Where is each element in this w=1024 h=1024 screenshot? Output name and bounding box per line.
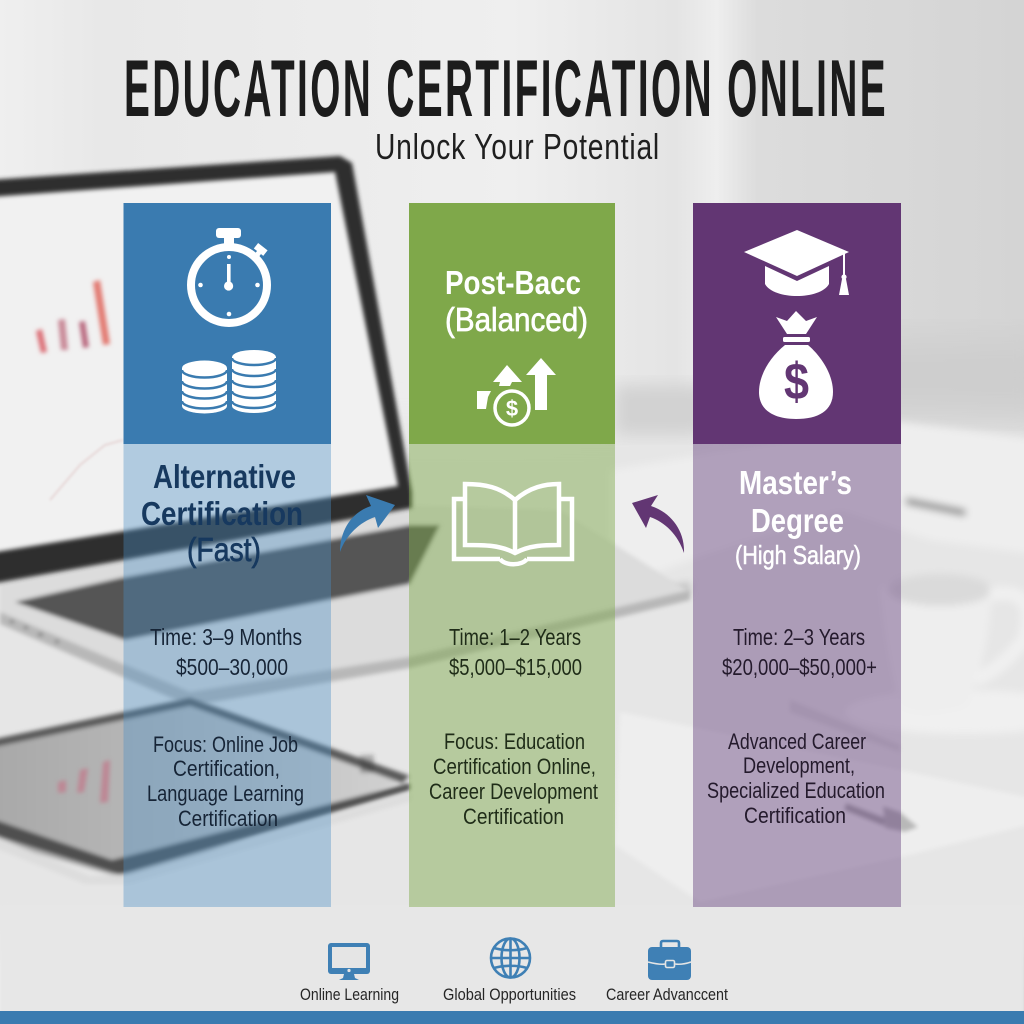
heading: post-bacc: (Balanced) — [445, 301, 588, 338]
heading: master's degree — [735, 464, 861, 570]
focus list: Development, — [743, 753, 855, 778]
laptop bar chart — [36, 280, 110, 353]
footer item: online learning — [300, 943, 399, 1004]
icon: coin stacks — [182, 350, 276, 414]
notebook and pen — [615, 700, 1024, 902]
tablet bar chart — [58, 760, 110, 803]
focus list: Certification, — [173, 756, 280, 781]
coffee cup — [845, 574, 1024, 734]
heading: post-bacc: Post-Bacc — [445, 264, 581, 301]
time and cost: Time: 1–2 Years — [449, 624, 581, 650]
icon: globe — [491, 938, 530, 978]
focus list: Career Development — [429, 779, 598, 804]
panel: master's degree — [693, 203, 901, 907]
heading: alternative certification: Certification — [141, 495, 303, 532]
icon: open book — [454, 484, 572, 564]
laptop base — [0, 505, 690, 706]
focus list: Certification Online, — [433, 754, 596, 779]
footer item: global opportunities: Global Opportunities — [443, 985, 576, 1004]
time and cost: Time: 3–9 Months — [150, 624, 302, 650]
focus list: Certification — [463, 804, 564, 829]
arrow: blue — [340, 495, 395, 552]
focus list: Certification — [178, 806, 278, 831]
subtitle: Unlock Your Potential — [375, 126, 660, 167]
heading: master's degree: Master’s — [739, 464, 852, 501]
time and cost — [722, 624, 877, 680]
time and cost: Time: 2–3 Years — [733, 624, 865, 650]
arrow: purple — [632, 495, 684, 553]
tablet — [0, 698, 412, 884]
icon: money growth arrows: $ — [506, 396, 518, 421]
time and cost — [150, 624, 302, 680]
heading: post-bacc — [445, 264, 588, 338]
focus list: Advanced Career — [728, 729, 866, 754]
time and cost: $20,000–$50,000+ — [722, 654, 877, 680]
heading: alternative certification — [141, 458, 303, 568]
focus list: Focus: Education — [444, 729, 585, 754]
icon: money bag — [759, 311, 833, 419]
footer item: online learning: Online Learning — [300, 985, 399, 1004]
panel: post-bacc — [409, 203, 615, 907]
focus list: Specialized Education — [707, 778, 885, 803]
footer item: career advancement: Career Advanccent — [606, 985, 728, 1004]
laptop screen — [0, 156, 412, 584]
footer item: career advancement — [606, 941, 728, 1004]
heading: master's degree: Degree — [751, 502, 844, 539]
focus list: Language Learning — [147, 781, 304, 806]
icon: money growth arrows — [477, 358, 556, 425]
heading: alternative certification: Alternative — [153, 458, 296, 495]
icon: briefcase — [648, 941, 691, 980]
icon: stopwatch — [191, 228, 268, 323]
heading: alternative certification: (Fast) — [187, 531, 261, 568]
focus list: Certification — [744, 803, 846, 828]
right background paper and pen — [610, 422, 1024, 612]
focus list: Focus: Online Job — [153, 732, 298, 757]
heading: master's degree: (High Salary) — [735, 540, 861, 570]
focus list — [147, 732, 304, 831]
icon: money bag: $ — [784, 353, 809, 411]
footer item: global opportunities — [443, 938, 576, 1004]
panel: alternative certification — [124, 203, 331, 907]
icon: graduation cap — [744, 230, 849, 296]
time and cost — [449, 624, 582, 680]
time and cost: $5,000–$15,000 — [449, 654, 582, 680]
focus list — [707, 729, 885, 828]
focus list — [429, 729, 598, 829]
icon: monitor — [328, 943, 370, 980]
time and cost: $500–30,000 — [176, 654, 288, 680]
bottom bar — [0, 1011, 1024, 1024]
